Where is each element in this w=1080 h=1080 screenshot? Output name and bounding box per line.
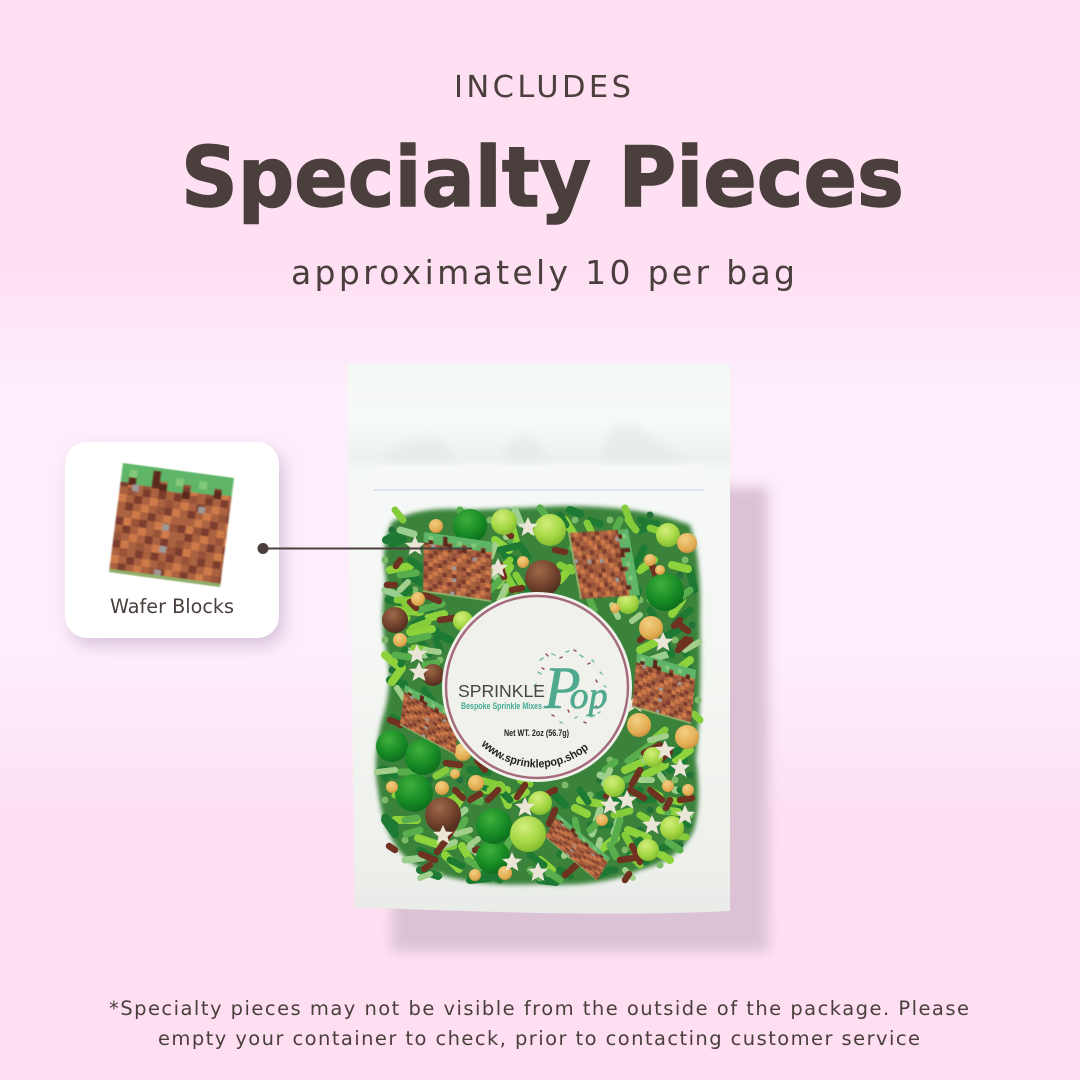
- wafer block 3: [632, 653, 696, 724]
- icon: wafer block: [109, 463, 234, 587]
- lime green sprinkles: [395, 508, 700, 865]
- net weight: Net WT. 2oz (56.7g): [504, 728, 569, 738]
- bag creases and zip seal: [374, 424, 704, 491]
- gold candies: [386, 519, 699, 881]
- brand Pop: Pop: [543, 655, 608, 721]
- brand tagline: Bespoke Sprinkle Mixes: [461, 701, 542, 711]
- wafer block 2: [568, 529, 640, 599]
- brown sprinkles: [387, 530, 692, 880]
- confetti: [534, 651, 606, 723]
- title: Specialty Pieces: [181, 129, 904, 226]
- website url: [481, 745, 593, 767]
- lime candies: [453, 509, 684, 861]
- filler nonpareils, light: [385, 520, 698, 880]
- white stars: [405, 517, 695, 881]
- under layer: pale sprinkles: [385, 510, 689, 860]
- wafer block 1: [423, 532, 492, 602]
- brand label: [442, 592, 632, 782]
- footnote: *Specialty pieces may not be visible from the outside of the package. Please: [109, 997, 969, 1020]
- footnote: [109, 997, 969, 1050]
- brand label: www.sprinklepop.shop: [482, 740, 588, 770]
- mid green sprinkles: [395, 508, 690, 880]
- brown candies: [382, 560, 561, 833]
- label: includes: INCLUDES: [454, 70, 631, 105]
- dark green candies: [376, 509, 684, 874]
- dark green sprinkles: [380, 515, 690, 880]
- card panel: [65, 442, 279, 638]
- footnote: empty your container to check, prior to contacting customer service: [158, 1027, 920, 1050]
- under layer: lime sprinkles: [385, 520, 690, 870]
- bag body: [347, 364, 730, 914]
- filler nonpareils, dark: [390, 515, 692, 870]
- wafer block 4: [400, 685, 460, 755]
- under layer: dark sprinkles: [383, 510, 694, 882]
- subtitle: approximately 10 per bag: [291, 253, 795, 292]
- brand SPRINKLE: SPRINKLE: [458, 681, 545, 701]
- bag shadow: [392, 487, 768, 951]
- product bag: [347, 364, 730, 914]
- connector line: [258, 543, 472, 554]
- label disc: [442, 592, 632, 782]
- label ring: [446, 596, 628, 778]
- pale green sprinkles: [377, 525, 699, 878]
- sprinkle mix: [376, 506, 700, 885]
- card label: Wafer Blocks: [110, 595, 234, 618]
- sprinkle base: [376, 506, 700, 885]
- callout card: [65, 442, 279, 638]
- wafer block 5: [545, 814, 610, 881]
